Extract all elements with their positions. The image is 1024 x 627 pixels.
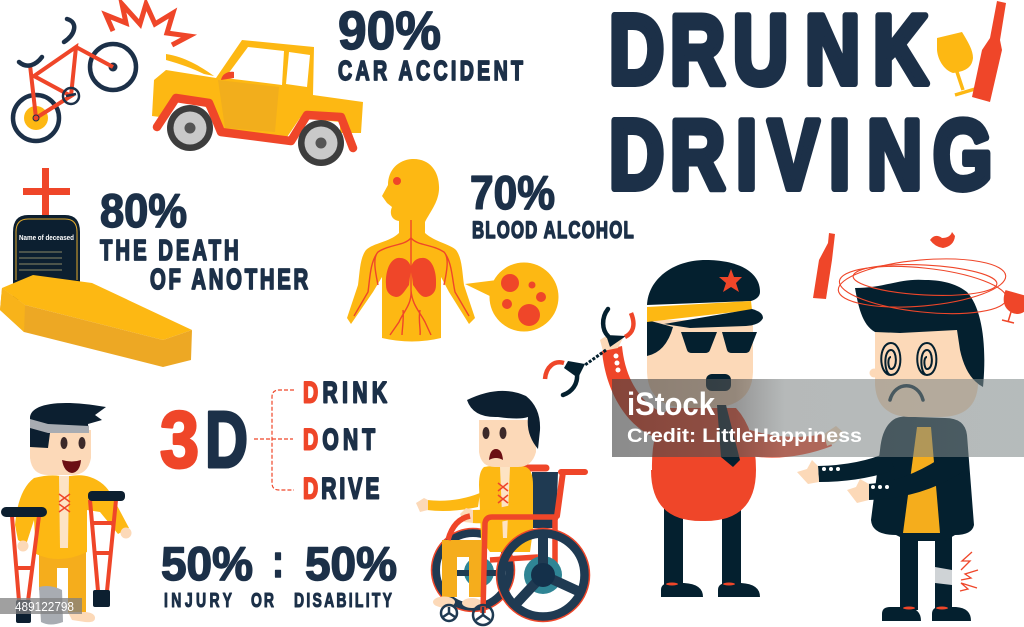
rear wheel [432, 528, 514, 612]
figure: man in wheelchair [416, 391, 590, 625]
stat: 90% car accident: CAR ACCIDENT [338, 56, 523, 87]
icon: crash burst [106, 4, 189, 45]
stat: 90% car accident: 90% [338, 1, 441, 61]
figure: drunk man [797, 232, 1024, 621]
head and face [467, 391, 540, 467]
icon: blood cell bubble [465, 262, 558, 332]
dizzy rings [836, 253, 1009, 321]
head [647, 320, 753, 408]
list: drink, dont, drive: DRINK [303, 377, 387, 409]
hands [797, 460, 819, 484]
ear [870, 368, 878, 378]
heading: 3D [160, 395, 248, 484]
head and face [30, 403, 106, 475]
icon: wrecked car [152, 40, 363, 166]
stat: 80% the death of another [100, 184, 308, 296]
legs and shoes [882, 530, 971, 621]
raised arm [602, 346, 668, 440]
stat: 50% : 50% injury or disability: OR [251, 588, 274, 612]
stock image id: 489122798 [15, 600, 74, 614]
icon: cross, gravestone and coffin: Name of deceased [19, 233, 74, 242]
stat: 50% : 50% injury or disability: : [272, 534, 284, 587]
icon: bicycle [13, 19, 136, 141]
stat: 70% blood alcohol: 70% [470, 166, 555, 219]
stock image id [0, 598, 82, 614]
stat: 50% : 50% injury or disability: INJURY [164, 588, 232, 612]
right crutch [88, 491, 125, 607]
chair frame [448, 515, 558, 613]
hair [855, 280, 984, 387]
legs and cast [39, 550, 95, 624]
icon: wine glass and bottle by title [937, 1, 1006, 102]
icon: human body with blood vessels [347, 159, 475, 342]
police cap [647, 260, 763, 328]
heading: 3D: 3 [160, 395, 199, 484]
list: drink, dont, drive [303, 377, 387, 505]
head [875, 320, 978, 417]
stat: 50% : 50% injury or disability: 50% [161, 537, 253, 590]
wine glass [1002, 291, 1024, 323]
bird [930, 232, 955, 248]
bottle [813, 233, 835, 299]
watermark band: iStock [627, 386, 715, 422]
torso [479, 465, 533, 552]
heading: 3D: D [205, 395, 248, 484]
stat: 50% : 50% injury or disability [161, 534, 397, 612]
list: drink, dont, drive: DONT [303, 424, 375, 456]
cuff buttons [614, 354, 620, 372]
right arm [750, 430, 832, 458]
suit [871, 416, 974, 541]
arms [818, 452, 895, 482]
frown [890, 386, 923, 400]
stat: 90% car accident [338, 1, 523, 87]
stat: 50% : 50% injury or disability: DISABILITY [294, 588, 392, 612]
torso and arms [15, 475, 129, 559]
icon: cross, gravestone and coffin [0, 168, 192, 367]
front wheel [496, 528, 590, 622]
torso [651, 408, 756, 521]
watermark band [612, 379, 1024, 457]
shirt [903, 427, 940, 533]
stat: 80% the death of another: OF ANOTHER [150, 264, 308, 296]
title: DRIVING [609, 99, 992, 210]
stat: 70% blood alcohol [470, 166, 634, 244]
chair back [532, 472, 558, 528]
dizzy icons [813, 232, 1024, 323]
figure: man on crutches [1, 403, 132, 624]
hair [647, 320, 673, 356]
title [609, 0, 992, 210]
cuff buttons [822, 467, 889, 489]
legs and shoes [661, 505, 760, 597]
stat: 70% blood alcohol: BLOOD ALCOHOL [472, 217, 634, 244]
watermark band: Credit: LittleHappiness [627, 426, 862, 447]
handcuffs [545, 309, 633, 395]
figure: police officer [545, 260, 844, 597]
stat: 50% : 50% injury or disability: 50% [305, 537, 397, 590]
pain sparks [960, 552, 978, 591]
spiral eyes [881, 343, 936, 375]
stat: 80% the death of another: THE DEATH [100, 235, 239, 267]
stat: 80% the death of another: 80% [100, 184, 187, 237]
legs and feet [442, 540, 484, 597]
casters [441, 605, 493, 625]
arms [427, 493, 480, 511]
sunglasses [681, 332, 757, 353]
tie [717, 405, 740, 467]
left crutch [1, 507, 47, 623]
mustache [706, 374, 731, 391]
list: drink, dont, drive: DRIVE [303, 473, 379, 505]
3D dashed connector [254, 390, 294, 490]
